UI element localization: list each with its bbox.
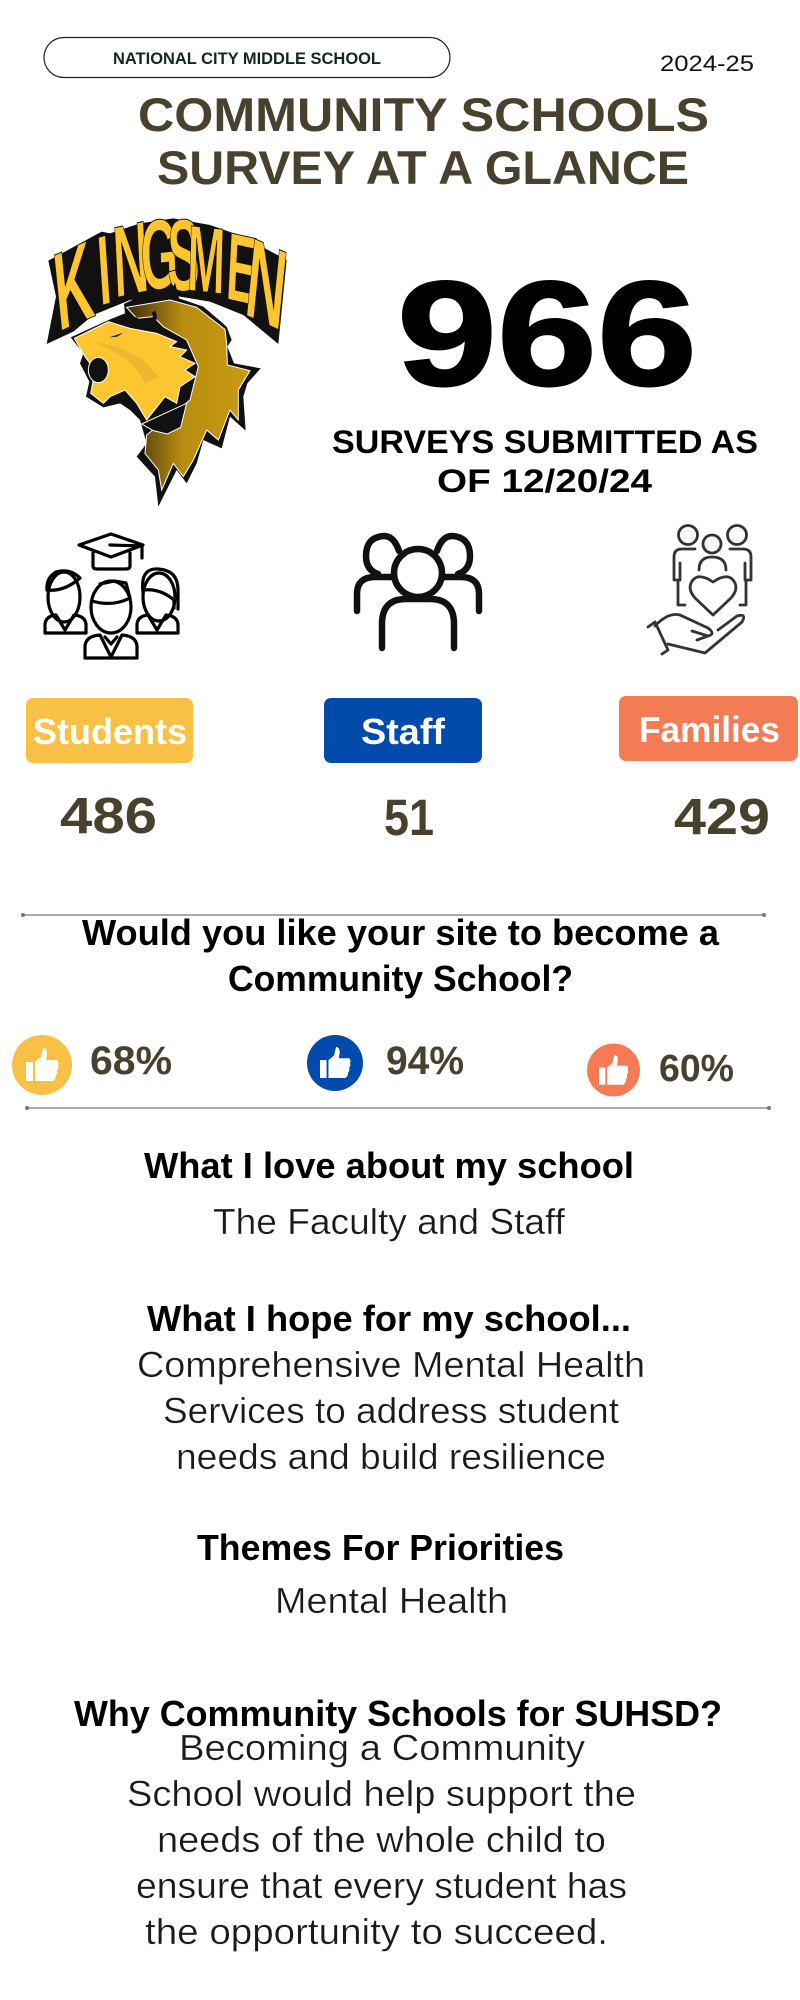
icon: staff <box>357 536 479 648</box>
logo banner <box>47 218 287 344</box>
section: what I hope: Services to address student <box>163 1390 619 1431</box>
caption: surveys submitted <box>332 424 758 499</box>
badge: staff: Staff <box>361 711 446 752</box>
logo wordmark: G <box>139 196 179 312</box>
logo wordmark: K <box>48 217 99 356</box>
question heading <box>82 912 720 999</box>
result: families thumbs up <box>587 1044 734 1096</box>
lion curl <box>130 312 155 325</box>
question heading: Would you like your site to become a <box>82 912 720 953</box>
section: why community schools: needs of the whole child to <box>157 1819 606 1860</box>
logo wordmark: I <box>94 213 114 327</box>
title: SURVEY AT A GLANCE <box>157 141 689 194</box>
section: why community schools: Becoming a Community <box>179 1727 585 1768</box>
logo wordmark: S <box>167 199 200 312</box>
big number: total surveys: 966 <box>397 250 697 417</box>
badge: students: Students <box>33 711 187 752</box>
count: families: 429 <box>674 788 770 845</box>
header: school name pill <box>44 38 450 78</box>
school year: 2024-25 <box>660 51 754 76</box>
lion mouth <box>88 357 108 383</box>
logo wordmark: M <box>186 205 226 314</box>
logo wordmark: E <box>224 212 260 327</box>
header: school name pill: NATIONAL CITY MIDDLE SCHOOL <box>113 50 381 68</box>
section: themes for priorities: Themes For Priorities <box>197 1527 564 1568</box>
lion shading <box>93 343 158 383</box>
result: families thumbs up: 60% <box>659 1048 734 1090</box>
section: why community schools: School would help support the <box>127 1773 636 1814</box>
logo wordmark: N <box>110 199 151 320</box>
section: what I love: What I love about my school <box>144 1145 634 1186</box>
icon: Kingsmen lion logo <box>47 196 292 507</box>
caption: surveys submitted: SURVEYS SUBMITTED AS <box>332 424 758 460</box>
lion jaw shadow <box>142 403 187 434</box>
section: what I love <box>144 1145 634 1242</box>
section: what I hope: needs and build resilience <box>176 1436 606 1477</box>
badge: students <box>26 698 193 763</box>
section: why community schools <box>74 1693 722 1952</box>
question heading: Community School? <box>228 958 573 999</box>
result: students thumbs up: 68% <box>90 1039 172 1083</box>
badge: families: Families <box>639 709 780 750</box>
logo wordmark: N <box>241 214 292 356</box>
lion face <box>74 322 195 420</box>
section: what I love: The Faculty and Staff <box>213 1201 566 1242</box>
badge: staff <box>324 698 482 763</box>
title <box>138 88 709 194</box>
lion eye <box>109 333 123 337</box>
result: staff thumbs up: 94% <box>386 1039 464 1083</box>
lion mane <box>127 300 250 490</box>
badge: families <box>619 696 798 761</box>
caption: surveys submitted: OF 12/20/24 <box>437 463 652 499</box>
logo wordmark <box>48 196 292 356</box>
section: why community schools: ensure that every student has <box>136 1865 627 1906</box>
count: staff: 51 <box>384 789 434 846</box>
section: why community schools: the opportunity to succeed. <box>145 1911 608 1952</box>
section: what I hope <box>137 1298 645 1477</box>
icon: families with heart in hand <box>648 526 751 654</box>
count: students: 486 <box>60 787 157 844</box>
title: COMMUNITY SCHOOLS <box>138 88 709 141</box>
section: what I hope: Comprehensive Mental Health <box>137 1344 645 1385</box>
lion silhouette <box>71 283 261 507</box>
section: themes for priorities: Mental Health <box>275 1580 508 1621</box>
section: why community schools: Why Community Schools for SUHSD? <box>74 1693 722 1734</box>
section: what I hope: What I hope for my school... <box>147 1298 631 1339</box>
section: themes for priorities <box>197 1527 564 1621</box>
icon: students <box>45 534 178 658</box>
result: staff thumbs up <box>307 1035 464 1091</box>
result: students thumbs up <box>12 1035 172 1095</box>
